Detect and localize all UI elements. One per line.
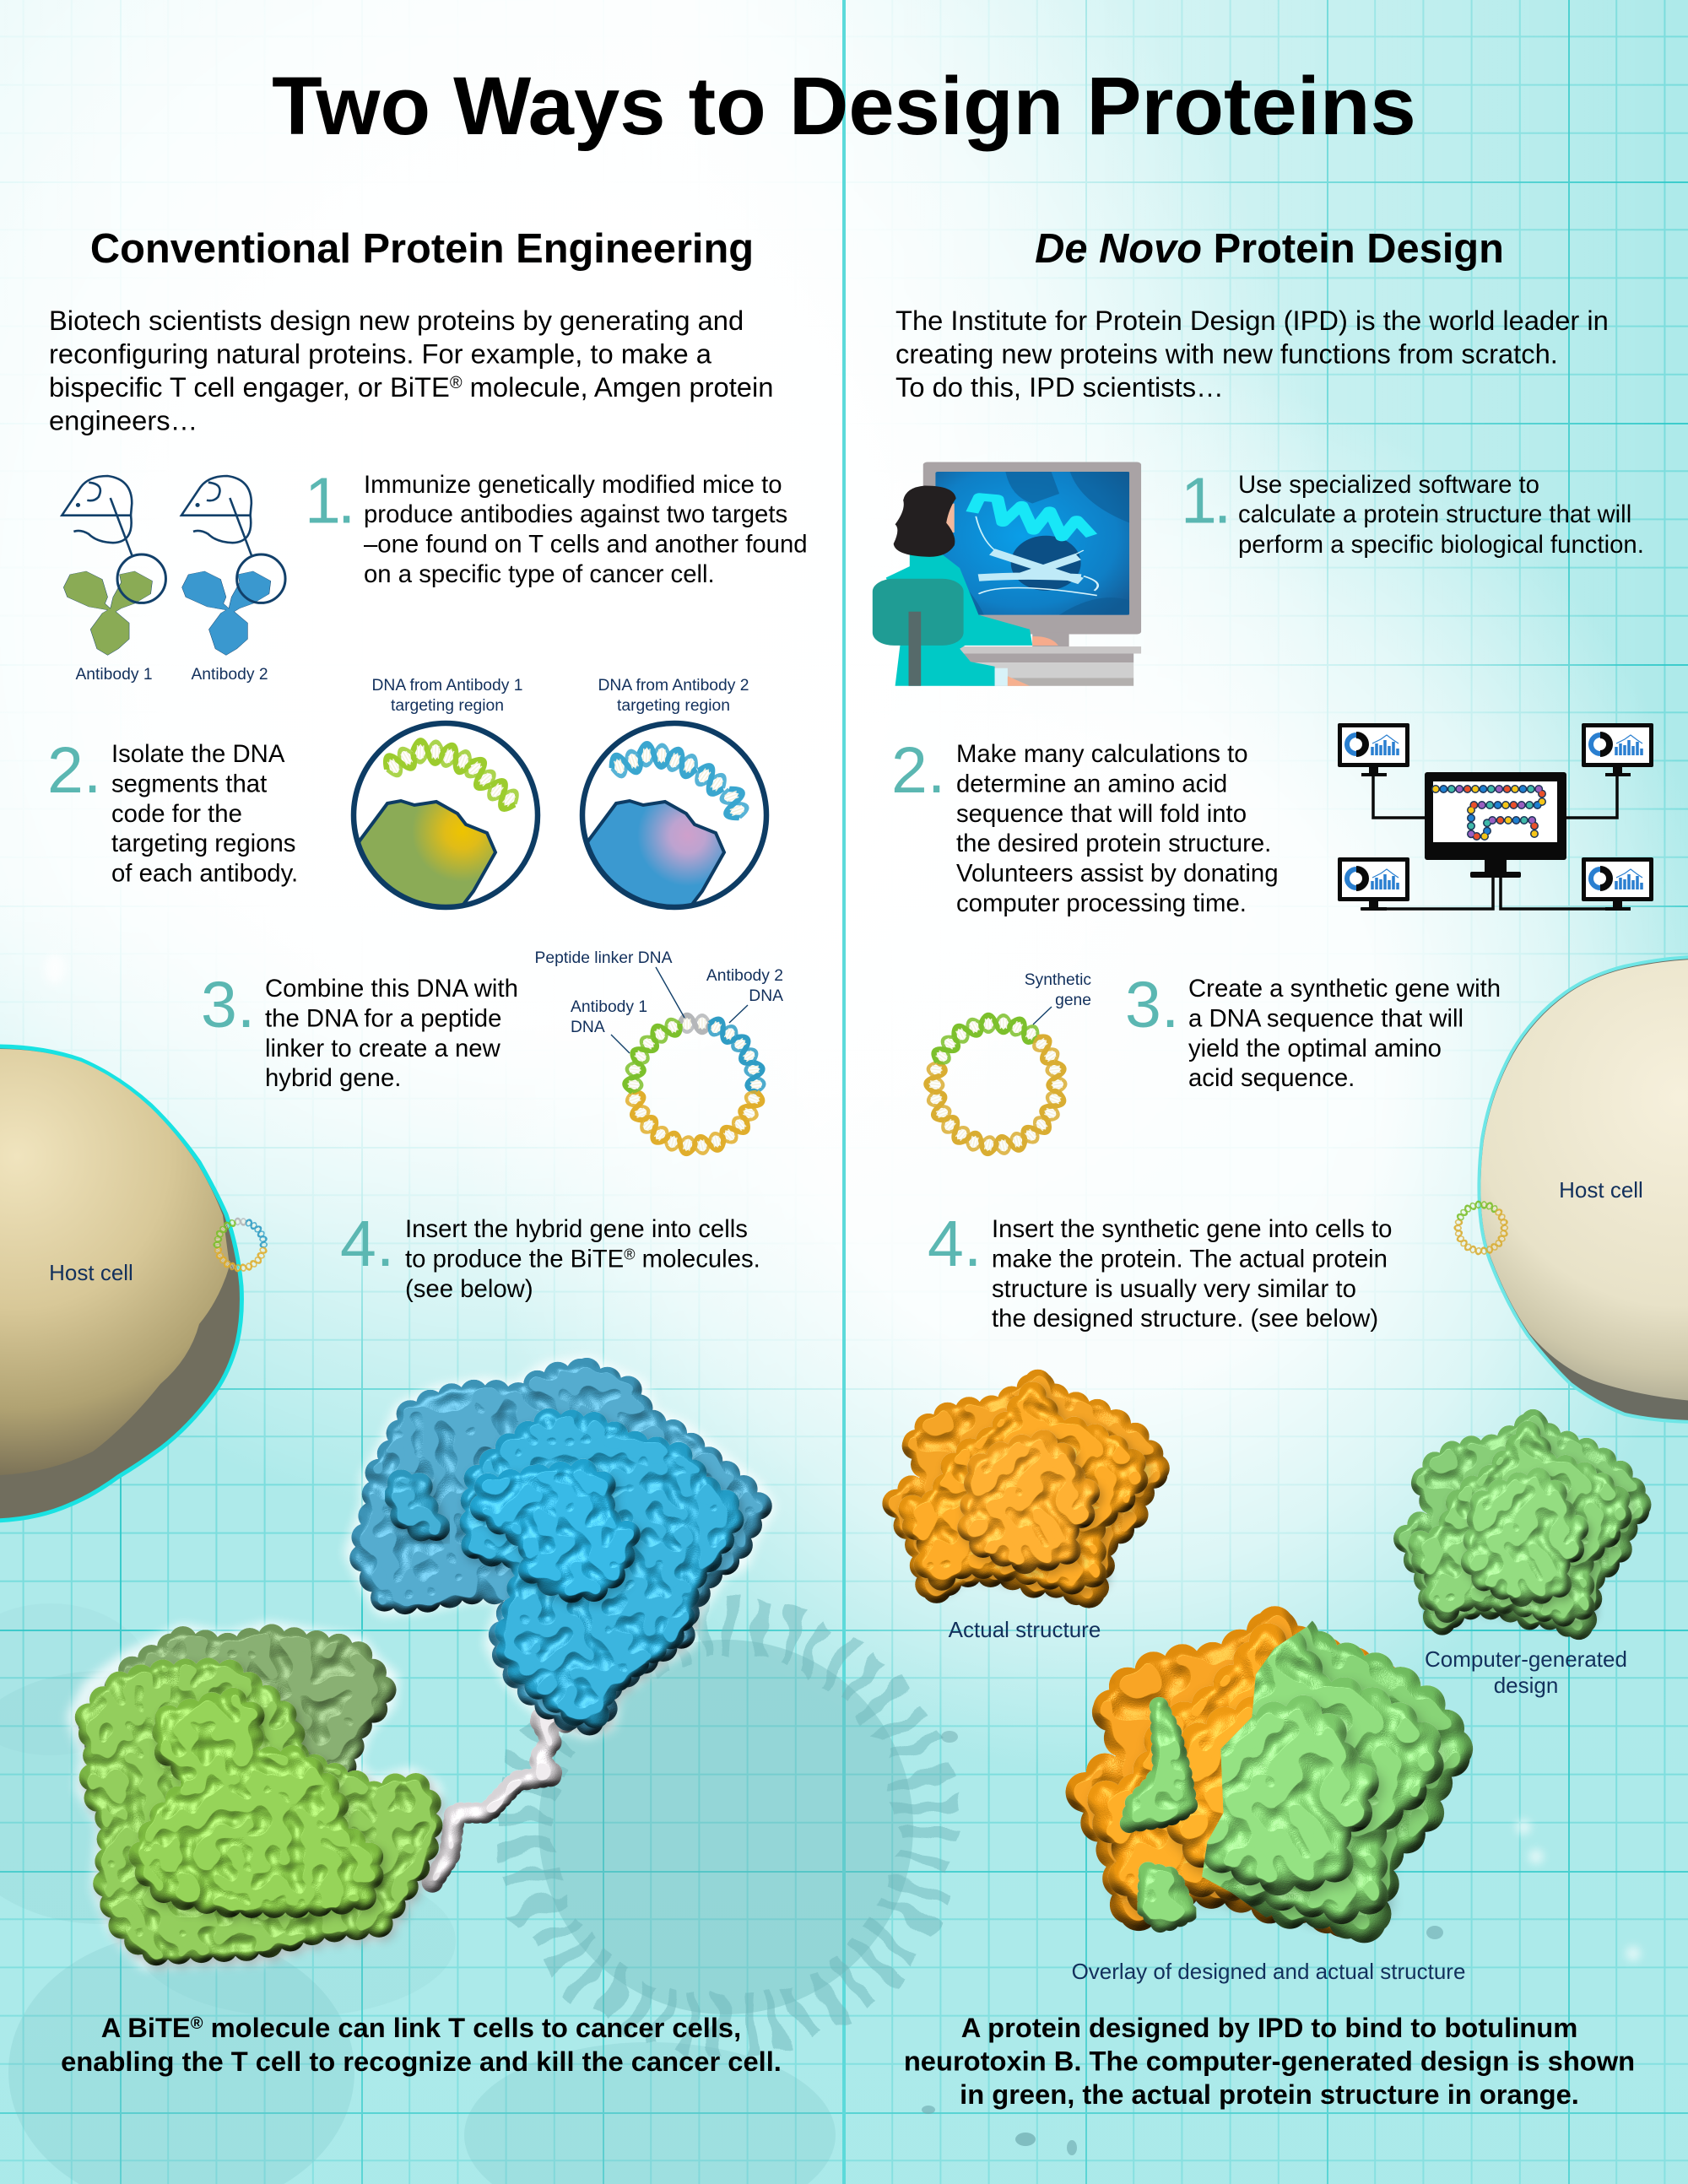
blue protein middle (473, 1422, 735, 1717)
blue protein front (484, 1473, 627, 1590)
monitor (923, 462, 1141, 635)
step 4 right text: make the protein. The actual protein (992, 1246, 1388, 1273)
label overlay: Overlay of designed and actual structure (1072, 1959, 1465, 1984)
label antibody 1 DNA: Antibody 1 (571, 998, 647, 1016)
step 4 right text: structure is usually very similar to (992, 1275, 1356, 1303)
step 2 right text: computer processing time. (956, 889, 1247, 917)
ghost cells background (0, 1603, 1443, 2184)
step 4 left text: ® (624, 1246, 635, 1262)
icon: mouse 2 (181, 476, 252, 555)
label antibody 2: Antibody 2 (191, 666, 268, 684)
label antibody 1 DNA: DNA (571, 1019, 605, 1036)
step 4 left text: Insert the hybrid gene into cells (405, 1215, 748, 1243)
intro text left: reconfiguring natural proteins. For example, to make a (49, 338, 712, 370)
caption right: neurotoxin B. The computer-generated design is shown (904, 2046, 1635, 2076)
caption right: in green, the actual protein structure in orange. (960, 2079, 1579, 2110)
step 4 left text: molecules. (635, 1246, 760, 1273)
caption left: molecule can link T cells to cancer cells, (203, 2012, 741, 2043)
step 4 right text: Insert the synthetic gene into cells to (992, 1215, 1392, 1243)
step 2 right text: determine an amino acid (956, 770, 1227, 798)
volunteer computer top right (1582, 723, 1653, 776)
step 2 left text: code for the (111, 800, 242, 828)
step 4 left text: (see below) (405, 1275, 533, 1303)
step 1 left text: –one found on T cells and another found (364, 530, 808, 559)
label antibody 2 DNA: DNA (749, 987, 783, 1005)
step 1 right text: perform a specific biological function. (1238, 531, 1644, 559)
small ring right (1454, 1202, 1508, 1255)
label peptide linker DNA: Peptide linker DNA (535, 949, 673, 967)
illustration: mice and antibodies (62, 476, 285, 655)
step 2 right text: Volunteers assist by donating (956, 859, 1279, 888)
host cell right (1479, 957, 1688, 1422)
green protein back (91, 1637, 383, 1780)
volunteer computer top left (1338, 723, 1409, 776)
leader line (1033, 1007, 1052, 1024)
distributed computing network (1338, 723, 1653, 911)
label computer-generated design: design (1494, 1673, 1558, 1698)
volunteer computer bottom left (1338, 857, 1409, 911)
step 4 left number: 4. (340, 1208, 394, 1280)
step 2 right text: the desired protein structure. (956, 830, 1271, 857)
host cell left (0, 1046, 241, 1521)
synthetic gene plasmid (926, 971, 1091, 1155)
step 1 right number: 1. (1181, 464, 1228, 537)
step 3 right text: yield the optimal amino (1188, 1035, 1442, 1062)
step 3 left text: linker to create a new (265, 1035, 501, 1062)
intro text left: engineers… (49, 405, 197, 435)
intro text left: Biotech scientists design new proteins by generating and (49, 305, 744, 336)
step 1 left text: produce antibodies against two targets (364, 500, 787, 528)
step 4 right text: the designed structure. (see below) (992, 1305, 1378, 1333)
caption right: A protein designed by IPD to bind to botulinum (961, 2012, 1577, 2043)
blue protein back (360, 1371, 759, 1722)
orange layer (1065, 1608, 1453, 1938)
green layer (1202, 1620, 1474, 1943)
step 3 left number: 3. (201, 969, 255, 1041)
caption left: A BiTE (101, 2012, 741, 2043)
step 1 left text: Immunize genetically modified mice to (364, 471, 782, 499)
icon: mouse 1 (62, 476, 132, 555)
icon: selection circle 1 (117, 554, 165, 603)
icon: antibody 2 (182, 571, 271, 655)
ring (926, 1015, 1066, 1155)
blue protein ridge (396, 1480, 439, 1531)
label actual structure: Actual structure (949, 1617, 1101, 1642)
icon: antibody 1 (63, 571, 152, 655)
step 1 left text: on a specific type of cancer cell. (364, 560, 715, 588)
step 3 left text: Combine this DNA with (265, 975, 518, 1003)
central computer (1425, 772, 1566, 878)
step 3 right text: Create a synthetic gene with (1188, 975, 1501, 1003)
step 4 right number: 4. (928, 1208, 982, 1280)
small ring left (214, 1219, 268, 1272)
step 2 left text: Isolate the DNA (111, 740, 285, 768)
actual structure protein (882, 1371, 1170, 1608)
label DNA from antibody 2: targeting region (617, 697, 730, 715)
step 3 right text: a DNA sequence that will (1188, 1004, 1463, 1033)
step 2 right text: Make many calculations to (956, 740, 1248, 768)
green patches (1129, 1706, 1188, 1925)
BiTE molecule (81, 1369, 761, 1956)
step 2 left text: of each antibody. (111, 859, 298, 888)
caption left: ® (191, 2014, 203, 2033)
heading: de novo protein design: De Novo Protein Design (1035, 226, 1504, 272)
desk (960, 646, 1141, 686)
step 2 right number: 2. (891, 734, 945, 807)
step 1 left number: 1. (305, 464, 352, 537)
caption left: enabling the T cell to recognize and kill the cancer cell. (61, 2046, 782, 2077)
circle: antibody 1 targeting region (354, 723, 538, 907)
label antibody 2 DNA: Antibody 2 (706, 967, 783, 985)
computer workstation illustration (873, 462, 1141, 686)
intro text right: The Institute for Protein Design (IPD) is the world leader in (895, 305, 1609, 336)
label antibody 1: Antibody 1 (75, 666, 153, 684)
screen protein ribbon (935, 472, 1129, 615)
wires (1361, 772, 1629, 909)
volunteer computer bottom right (1582, 857, 1653, 911)
intro text right: To do this, IPD scientists… (895, 371, 1224, 403)
intro text left: bispecific T cell engager, or BiTE (49, 371, 773, 403)
label host cell left: Host cell (49, 1260, 133, 1285)
step 2 right text: sequence that will fold into (956, 800, 1247, 828)
step 3 left text: the DNA for a peptide (265, 1004, 501, 1033)
circle: antibody 2 targeting region (582, 723, 766, 907)
label DNA from antibody 2: DNA from Antibody 2 (598, 677, 749, 695)
green protein main (89, 1671, 429, 1952)
label computer-generated design: Computer-generated (1425, 1646, 1627, 1672)
step 3 right text: acid sequence. (1188, 1064, 1355, 1092)
person (873, 485, 1058, 686)
computer-generated design protein (1393, 1411, 1651, 1640)
stand (1032, 633, 1069, 646)
step 1 right text: Use specialized software to (1238, 471, 1539, 499)
step 3 left text: hybrid gene. (265, 1064, 401, 1092)
label DNA from antibody 1: DNA from Antibody 1 (372, 677, 522, 695)
leader lines (611, 967, 748, 1053)
label DNA from antibody 1: targeting region (391, 697, 504, 715)
hybrid gene ring (625, 1015, 765, 1155)
label host cell right: Host cell (1559, 1177, 1643, 1203)
intro text left: ® (450, 374, 463, 392)
step 2 left text: segments that (111, 770, 267, 798)
screen (935, 472, 1129, 615)
step 2 left text: targeting regions (111, 830, 295, 857)
halo (81, 1369, 761, 1956)
label synthetic gene: Synthetic (1025, 971, 1091, 989)
heading: conventional protein engineering: Conventional Protein Engineering (90, 226, 754, 272)
step 4 left text: to produce the BiTE (405, 1246, 760, 1273)
overlay of designed and actual structure (1065, 1608, 1473, 1943)
intro text right: creating new proteins with new functions from scratch. (895, 338, 1558, 370)
plasmid with labels (535, 949, 783, 1155)
green protein front (139, 1700, 375, 1905)
step 2 left number: 2. (47, 734, 101, 807)
label synthetic gene: gene (1055, 992, 1091, 1009)
intro text left: molecule, Amgen protein (463, 371, 773, 403)
title: Two Ways to Design Proteins (272, 60, 1416, 152)
step 1 right text: calculate a protein structure that will (1238, 500, 1631, 528)
step 3 right number: 3. (1125, 969, 1179, 1041)
linker (430, 1717, 565, 1884)
icon: selection circle 2 (237, 554, 285, 603)
